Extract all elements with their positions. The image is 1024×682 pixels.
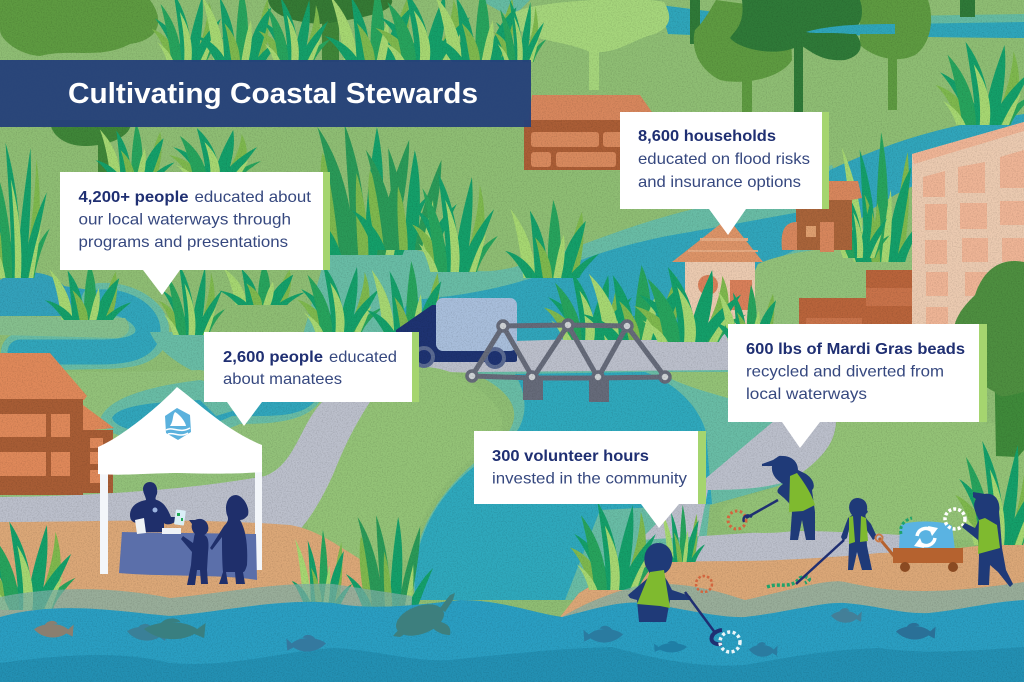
upper river top <box>480 0 1024 38</box>
water <box>0 600 1024 682</box>
tent logo <box>165 408 191 440</box>
callout: 4,200+ people: our local waterways through <box>78 212 291 228</box>
deep water <box>0 647 1024 682</box>
brick building lower right <box>799 270 915 326</box>
grass tuft by volunteer <box>570 502 705 590</box>
top house <box>524 95 654 170</box>
left lower pond rim <box>100 380 322 440</box>
bridge <box>467 320 670 402</box>
callout: 600 lbs of Mardi Gras beads: 600 lbs of Mardi Gras beads <box>746 341 965 358</box>
right grass bank <box>720 238 925 345</box>
callout: 2,600 people: about manatees <box>223 371 342 388</box>
callout: 4,200+ people: 4,200+ people <box>78 189 189 206</box>
callout: 8,600 households: educated on flood risks <box>638 151 810 168</box>
callout: 8,600 households: 8,600 households <box>638 128 776 145</box>
right lawn <box>721 422 1024 545</box>
callout: 600 lbs of Mardi Gras beads <box>728 324 987 448</box>
right beach <box>560 540 1024 625</box>
child <box>181 519 209 585</box>
left grass patch <box>0 316 129 338</box>
upper road <box>395 334 730 373</box>
tree right <box>953 261 1024 457</box>
callout: 4,200+ people: programs and presentations <box>78 234 288 251</box>
callout: 300 volunteer hours: 300 volunteer hours <box>492 448 649 465</box>
lawn beside tent <box>0 366 372 500</box>
table <box>119 532 257 580</box>
callout: 4,200+ people: educated about <box>194 189 312 206</box>
truck <box>395 298 517 367</box>
grass tuft left beach <box>0 522 76 610</box>
callout: 8,600 households: and insurance options <box>638 174 801 191</box>
callout: 2,600 people: educated <box>329 349 397 366</box>
river: light teal rim <box>300 165 870 345</box>
callout: 2,600 people <box>204 332 419 426</box>
central pond water <box>415 372 712 600</box>
volunteer in water <box>628 543 740 652</box>
left upper teal <box>150 332 420 385</box>
tent legs <box>100 470 262 574</box>
title: Cultivating Coastal Stewards <box>68 78 478 110</box>
callout: 4,200+ people <box>60 172 330 295</box>
callout: 300 volunteer hours: invested in the community <box>492 470 687 488</box>
grass tuft far right <box>955 441 1024 545</box>
grass tufts by house <box>544 265 786 342</box>
tent canopy <box>98 387 262 475</box>
tent <box>98 387 262 574</box>
grass tufts near truck <box>45 261 453 336</box>
grass strip right of bridge <box>660 372 805 480</box>
wet shoreline <box>0 581 1024 640</box>
title banner <box>0 60 531 127</box>
callout: 600 lbs of Mardi Gras beads: local waterways <box>746 386 867 403</box>
grass tuft centre beach <box>292 515 433 612</box>
volunteer with beads on path <box>728 456 815 540</box>
river: main water <box>380 114 1024 345</box>
turtle <box>392 593 455 642</box>
tree light top <box>510 0 669 90</box>
fish group <box>34 608 936 657</box>
wagon <box>876 518 963 572</box>
adult <box>210 495 248 584</box>
callout: 2,600 people: 2,600 people <box>223 349 323 366</box>
orange beads <box>696 576 712 592</box>
left building <box>0 353 114 495</box>
small house <box>672 218 763 325</box>
grass tufts right <box>830 42 1024 262</box>
central grass island <box>290 366 502 560</box>
left pond <box>0 272 130 320</box>
central pond rim <box>414 370 800 600</box>
left beach <box>0 520 410 620</box>
grass tufts top row <box>152 0 546 62</box>
left lower pond water <box>112 400 314 432</box>
tree under banner <box>50 120 131 176</box>
recycling bin <box>899 522 955 550</box>
tree dark top <box>268 0 392 62</box>
green beads on sand <box>767 577 809 587</box>
hut behind callout <box>782 181 862 252</box>
tall pale building <box>912 122 1024 330</box>
right road <box>640 420 900 570</box>
left road <box>0 402 370 535</box>
volunteer with wagon <box>796 498 877 584</box>
callout: 600 lbs of Mardi Gras beads: recycled and diverted from <box>746 364 944 380</box>
trees top right <box>690 0 975 112</box>
callout: 8,600 households <box>620 112 829 235</box>
top tree left <box>0 0 158 56</box>
volunteer with white beads <box>945 492 1013 587</box>
grass tufts mid <box>0 123 599 278</box>
left waterway <box>20 302 148 352</box>
left waterway rim <box>20 302 150 352</box>
callout: 300 volunteer hours <box>474 431 706 528</box>
attendant <box>130 482 186 534</box>
